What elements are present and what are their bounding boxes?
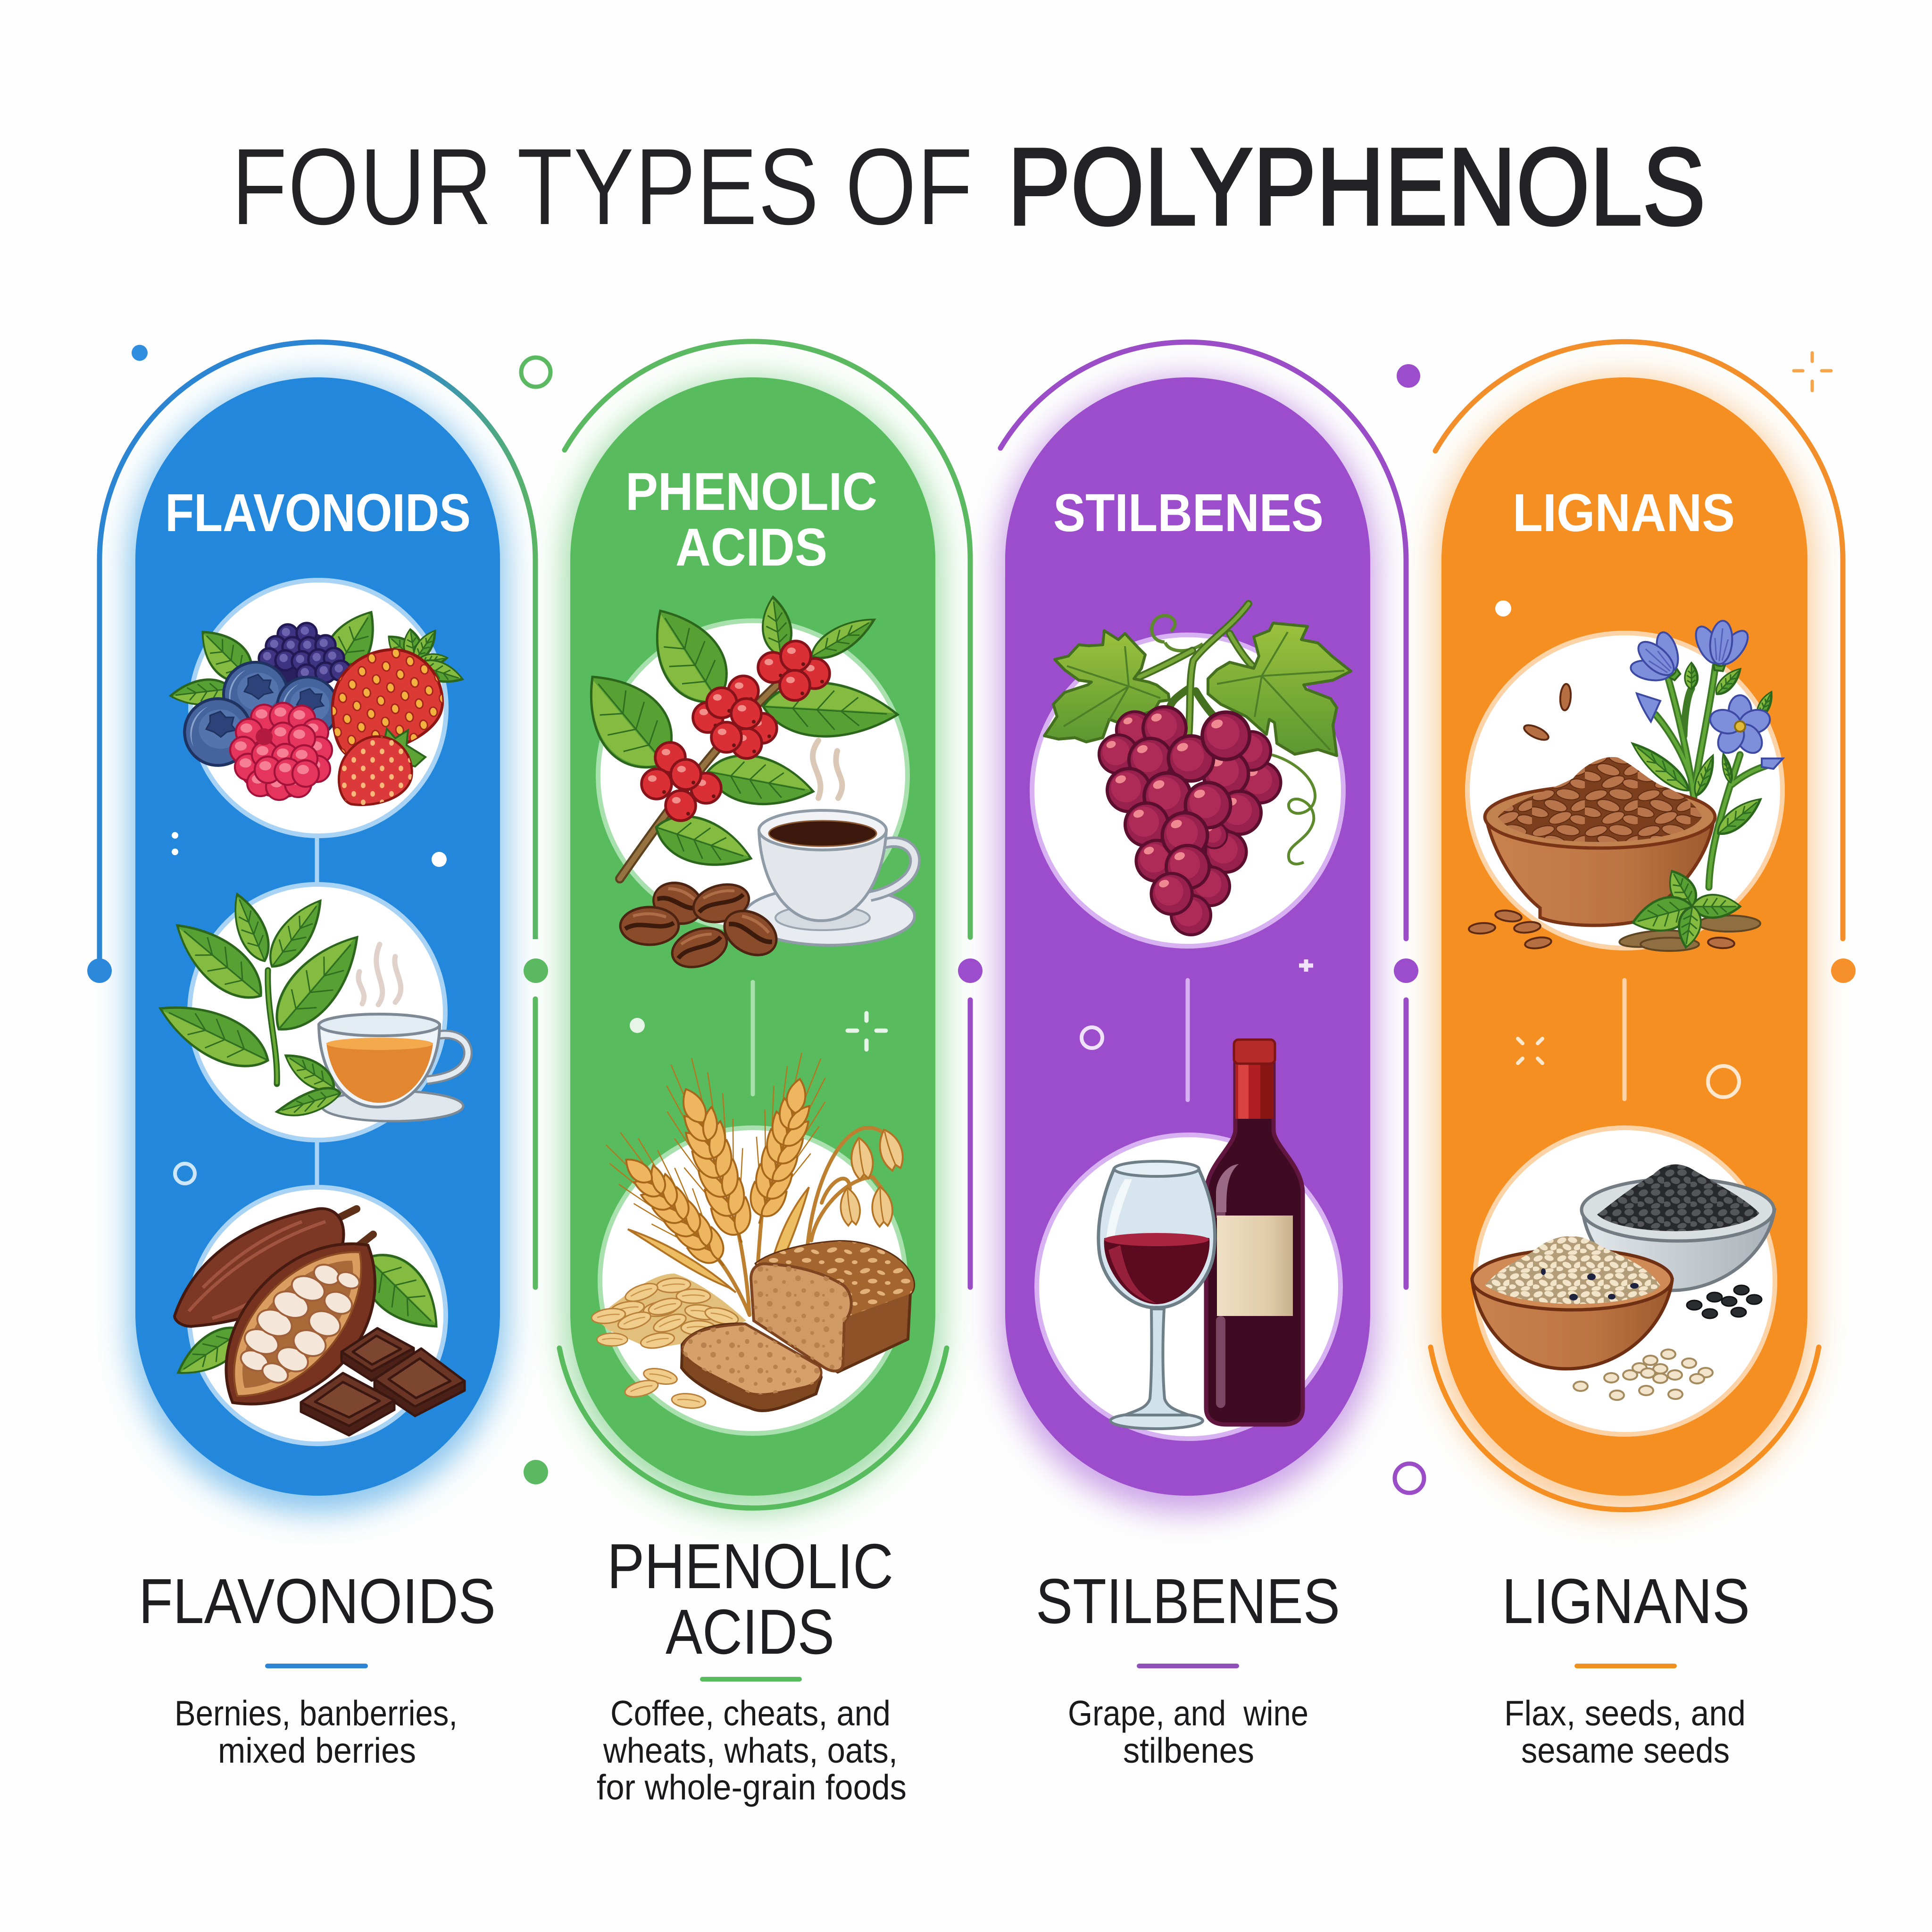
caption heading: FLAVONOIDS [139,1566,496,1637]
icon: grains and bread [591,1048,914,1411]
caption heading: STILBENES [1036,1566,1340,1637]
connector line green [751,982,755,1094]
heading in capsule: phenolic acids: PHENOLIC [625,462,877,521]
capsule body green [570,377,935,1496]
sparkle decorations orange [1495,600,1739,1097]
circle backgrounds purple [1032,635,1343,1439]
decorative dot blue [132,345,148,361]
lower ring segments [533,999,538,1287]
caption description: Grape, and wine [1068,1693,1308,1733]
capsule body orange [1441,377,1807,1496]
title [231,125,1706,248]
heading in capsule: phenolic acids [625,462,877,577]
heading in capsule: phenolic acids: ACIDS [675,517,827,577]
caption heading [607,1531,893,1667]
sparkle decorations purple [1082,959,1313,1048]
caption rule [700,1677,802,1682]
connector dots purple [958,364,1420,983]
connector dots green [524,958,548,1484]
caption heading: ACIDS [666,1596,834,1667]
icon: flax bowl and flowers [1468,617,1783,951]
icon: cacao and chocolate [170,1208,465,1440]
caption description: Coffee, cheats, and [610,1693,891,1733]
caption rule [1137,1664,1239,1668]
outer ring: lignans [1435,341,1843,939]
caption description: mixed berries [218,1731,416,1770]
bottom arc orange [1431,1347,1819,1510]
caption: lignans [1502,1566,1750,1770]
caption: phenolic acids [597,1531,907,1807]
caption: flavonoids [139,1566,496,1770]
circle backgrounds blue [189,580,446,1444]
connector dot orange [1831,958,1856,983]
caption description: wheats, whats, oats, [603,1731,898,1770]
circle backgrounds green [598,621,908,1433]
caption: stilbenes [1036,1566,1340,1770]
lower ring segments purple [970,1000,1406,1287]
panel: phenolic acids [521,341,970,1508]
bottom arc green [559,1348,947,1508]
caption description [597,1693,907,1807]
icon: mixed berries [169,601,465,805]
panel: flavonoids [87,342,535,1496]
caption description [175,1693,458,1770]
sparkle decorations [172,832,447,1183]
outer ring: phenolic acids [565,341,970,937]
icon: wine glass and bottle [1099,1040,1303,1429]
icon: tea leaves and cup [151,890,468,1124]
title: POLYPHENOLS [1008,125,1706,248]
sparkle decorations green [630,1013,886,1049]
panel: lignans [1431,341,1856,1510]
decorative ring green [521,358,550,387]
connector line orange [1623,980,1626,1099]
outer ring: flavonoids [100,342,535,962]
connectors between circles [315,835,319,1189]
caption description [1068,1693,1308,1770]
decorative sparkle orange [1794,353,1831,391]
heading in capsule: flavonoids: FLAVONOIDS [165,483,471,542]
title: FOUR TYPES OF [231,125,973,248]
icon: grapes [1044,604,1351,935]
caption description: sesame seeds [1521,1731,1730,1770]
caption heading: LIGNANS [1502,1566,1750,1637]
caption description: Flax, seeds, and [1504,1693,1746,1733]
heading in capsule: lignans: LIGNANS [1513,483,1735,542]
outer ring: stilbenes [1000,342,1406,939]
caption rule [265,1664,368,1668]
circle backgrounds orange [1467,633,1782,1434]
caption description: for whole-grain foods [597,1767,907,1807]
icon: sesame bowls [1472,1165,1774,1400]
connector line purple [1186,980,1190,1100]
decorative ring purple [1395,1464,1424,1493]
capsule body blue [135,377,500,1496]
caption description [1504,1693,1746,1770]
capsule body purple [1005,377,1370,1496]
panel: stilbenes [958,342,1424,1496]
icon: coffee plant and cup [566,595,915,974]
caption description: Bernies, banberries, [175,1693,458,1733]
caption heading: PHENOLIC [607,1531,893,1602]
heading in capsule: stilbenes: STILBENES [1053,483,1324,542]
caption rule [1574,1664,1677,1668]
pill glows [128,377,1815,1513]
connector dot blue [87,958,112,983]
caption description: stilbenes [1123,1731,1254,1770]
